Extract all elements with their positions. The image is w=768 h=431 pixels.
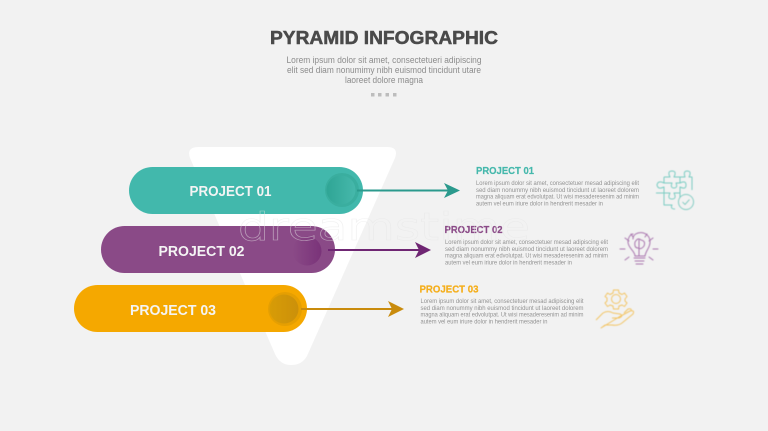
watermark: dreamstime: [238, 205, 530, 249]
pill: project 03: [74, 285, 307, 332]
text block: project 02: magna aliquam erat edvolutpat. Ut wisi mesaderesenim ad minim: [445, 252, 608, 260]
pill: project 02: [101, 226, 335, 273]
text block: project 03: PROJECT 03: [420, 284, 479, 296]
text block: project 03: Lorem ipsum dolor sit amet, consectetuer mesad adipiscing elit: [420, 298, 584, 305]
text block: project 03: autem vel eum iriure dolor in hendrerit mesader in: [420, 318, 548, 326]
text block: project 01: Lorem ipsum dolor sit amet, consectetuer mesad adipiscing elit: [476, 180, 639, 187]
text block: project 01: sed diam nonummy nibh euismod tincidunt ut laoreet dolorem: [476, 187, 639, 194]
text block: project 01: [476, 166, 639, 208]
pill: project 03: PROJECT 03: [130, 303, 216, 319]
pill: project 01: [129, 167, 363, 214]
arrow: project 01: [357, 183, 460, 198]
pill: project 01: PROJECT 01: [190, 184, 272, 200]
subtitle text: Lorem ipsum dolor sit amet, consectetueri adipiscing: [286, 55, 482, 65]
icon: light bulb with brain: [620, 233, 658, 264]
arrow: project 03: [301, 301, 404, 317]
text block: project 03: magna aliquam erat edvolutpat. Ut wisi mesaderesenim ad minim: [420, 312, 584, 318]
subtitle text: laoreet dolore magna: [345, 75, 423, 85]
text block: project 01: magna aliquam erat edvolutpat. Ut wisi mesaderesenim ad minim: [476, 194, 639, 200]
pill: project 02: PROJECT 02: [158, 244, 244, 260]
text block: project 02: autem vel eum iriure dolor in hendrerit mesader in: [445, 260, 573, 266]
inverted pyramid background: [189, 147, 396, 365]
text block: project 02: Lorem ipsum dolor sit amet, consectetuer mesad adipiscing elit: [445, 239, 608, 246]
text block: project 01: autem vel eum iriure dolor in hendrerit mesader in: [476, 200, 604, 208]
subtitle text: elit sed diam nonumimy nibh euismod tincidunt utare: [287, 65, 481, 75]
text block: project 03: [420, 284, 584, 326]
text block: project 02: PROJECT 02: [444, 225, 503, 236]
text block: project 02: [444, 225, 608, 266]
text block: project 01: PROJECT 01: [476, 166, 534, 177]
text block: project 02: sed diam nonummy nibh euismod tincidunt ut laoreet dolorem: [445, 246, 608, 253]
icon: hand holding gear: [596, 290, 634, 328]
decorative header dots: [371, 93, 396, 96]
icon: puzzle with check: [656, 171, 694, 210]
subtitle text: [286, 55, 482, 85]
text block: project 03: sed diam nonummy nibh euismod tincidunt ut laoreet dolorem: [420, 305, 584, 312]
arrow: project 02: [328, 242, 431, 258]
title: PYRAMID INFOGRAPHIC: [270, 28, 498, 48]
